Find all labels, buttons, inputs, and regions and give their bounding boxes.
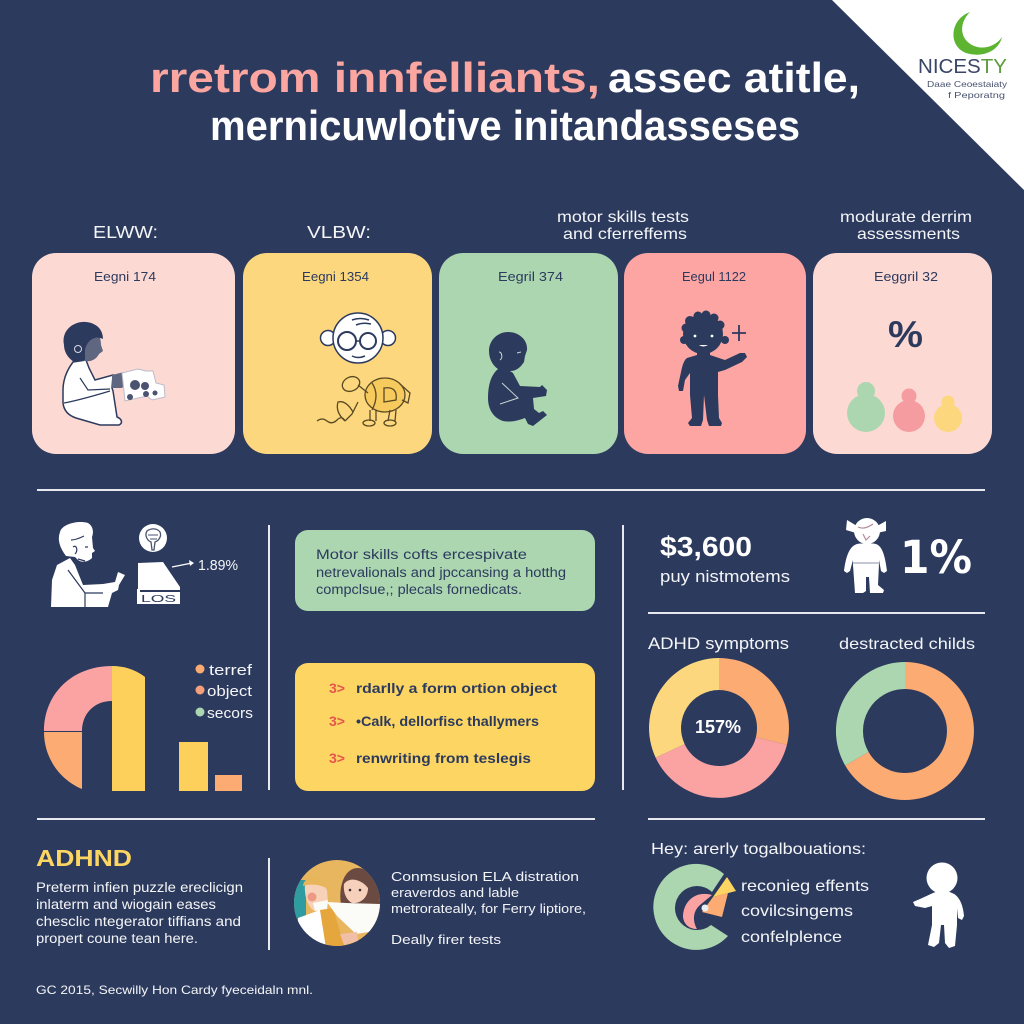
icon: seated baby silhouette [488, 332, 547, 426]
card 5 label: Eeggril 32 [874, 269, 938, 284]
text block: clinical note: Conmsusion ELA distration [391, 869, 579, 884]
panel: motor skills note [295, 530, 595, 611]
column headings [93, 209, 972, 243]
chart: symptoms donut [649, 658, 789, 798]
text block: ADHND description: inlaterm and wiogain eases [36, 897, 216, 912]
chart: distracted donut [836, 662, 974, 800]
icon: standing child silhouette [678, 310, 747, 426]
icon: plus sign [732, 325, 746, 341]
chart: nested ring [653, 864, 736, 950]
panel: motor skills note: compclsue,; plecals fornedicats. [316, 582, 522, 597]
text block: ADHND description: propert coune tean here. [36, 931, 198, 946]
ring chart labels: reconieg effents [741, 878, 869, 895]
column headings: assessments [857, 226, 960, 243]
ring chart labels: confelplence [741, 929, 842, 946]
heading: destracted childs: destracted childs [839, 636, 975, 653]
list items: rdarlly a form ortion object [356, 680, 557, 696]
logo wordmark: NICESTY [918, 55, 1007, 78]
icon: face with glasses [320, 313, 396, 363]
icon: person reading [51, 522, 125, 607]
list items: 3> [329, 680, 345, 696]
icon: toy creature [317, 374, 410, 426]
panel: card 4 [624, 253, 806, 454]
icon: child with puzzle [63, 322, 165, 425]
card 2 label: Eegni 1354 [302, 269, 369, 284]
stat: $3,600: $3,600 [660, 531, 752, 562]
stat: 1.89%: 1.89% [198, 558, 238, 574]
panel: card 1 ELWW [32, 253, 235, 454]
panel: card 3 [439, 253, 618, 454]
icon: coloured figures [847, 382, 962, 432]
illustration: clinician and child [294, 860, 381, 948]
text block: ADHND description: Preterm infien puzzle ereclicign [36, 880, 243, 895]
ring chart labels: covilcsingems [741, 903, 853, 920]
icon: device with brain [137, 524, 194, 605]
panel: checklist [295, 663, 595, 791]
logo tagline: Daae Ceoestaiaty [927, 79, 1008, 89]
list items: 3> [329, 750, 345, 766]
panel: card 5 [813, 253, 992, 454]
chart legend: secors [207, 705, 253, 722]
text block: clinical note: Deally firer tests [391, 932, 502, 947]
list items: •Calk, dellorfisc thallymers [356, 713, 539, 729]
title: mernicuwlotive initandasseses [210, 102, 800, 149]
heading: ADHD symptoms: ADHD symptoms [648, 634, 789, 653]
chart legend: object [207, 683, 253, 700]
panel: motor skills note: Motor skills cofts ercespivate [316, 547, 527, 562]
heading: ADHND: ADHND [36, 845, 132, 871]
column headings: motor skills tests [557, 209, 689, 226]
chart legend: terref [209, 662, 253, 679]
icon: green crescent logo [954, 12, 1002, 55]
title [150, 54, 860, 149]
ring chart labels [741, 878, 869, 946]
text block: clinical note [391, 869, 586, 947]
logo tagline [927, 79, 1008, 100]
column headings: VLBW: [307, 222, 371, 242]
list items: renwriting from teslegis [356, 750, 531, 766]
icon: child silhouette [913, 862, 964, 948]
text block: clinical note: eraverdos and lable [391, 885, 519, 900]
column headings: modurate derrim [840, 209, 972, 226]
logo tagline: f Peporatng [948, 90, 1005, 100]
panel: card 2 VLBW [243, 253, 432, 454]
icon: girl figure [844, 518, 887, 593]
stat: $3,600: puy nistmotems [660, 567, 790, 586]
section dividers [37, 490, 985, 950]
icon: device with brain: LOS [141, 593, 176, 605]
percent sign: % [888, 314, 923, 355]
text block: clinical note: metrorateally, for Ferry liptiore, [391, 901, 586, 916]
card 3 label: Eegril 374 [498, 269, 563, 284]
chart: arc and bars [44, 666, 242, 791]
stat: 1%: 1% [900, 531, 972, 584]
text block: ADHND description: chesclic ntegerator tiffians and [36, 914, 241, 929]
heading: early evaluations: Hey: arerly togalbouations: [651, 841, 866, 858]
column headings: and cferreffems [563, 226, 687, 243]
list items: 3> [329, 713, 345, 729]
list items [329, 680, 557, 766]
title: rretrom innfelliants, [150, 54, 600, 101]
text block: ADHND description [36, 880, 243, 946]
chart legend [196, 662, 253, 722]
column headings: ELWW: [93, 222, 158, 242]
panel: motor skills note: netrevalionals and jpccansing a hotthg [316, 565, 566, 580]
donut value: 157% [695, 717, 741, 737]
card 1 label: Eegni 174 [94, 269, 156, 284]
title: assec atitle, [608, 54, 860, 101]
footer source: GC 2015, Secwilly Hon Cardy fyeceidaln mnl. [36, 983, 313, 997]
logo corner [832, 0, 1024, 190]
card 4 label: Eegul 1122 [682, 269, 746, 284]
stat: $3,600 [660, 531, 790, 586]
